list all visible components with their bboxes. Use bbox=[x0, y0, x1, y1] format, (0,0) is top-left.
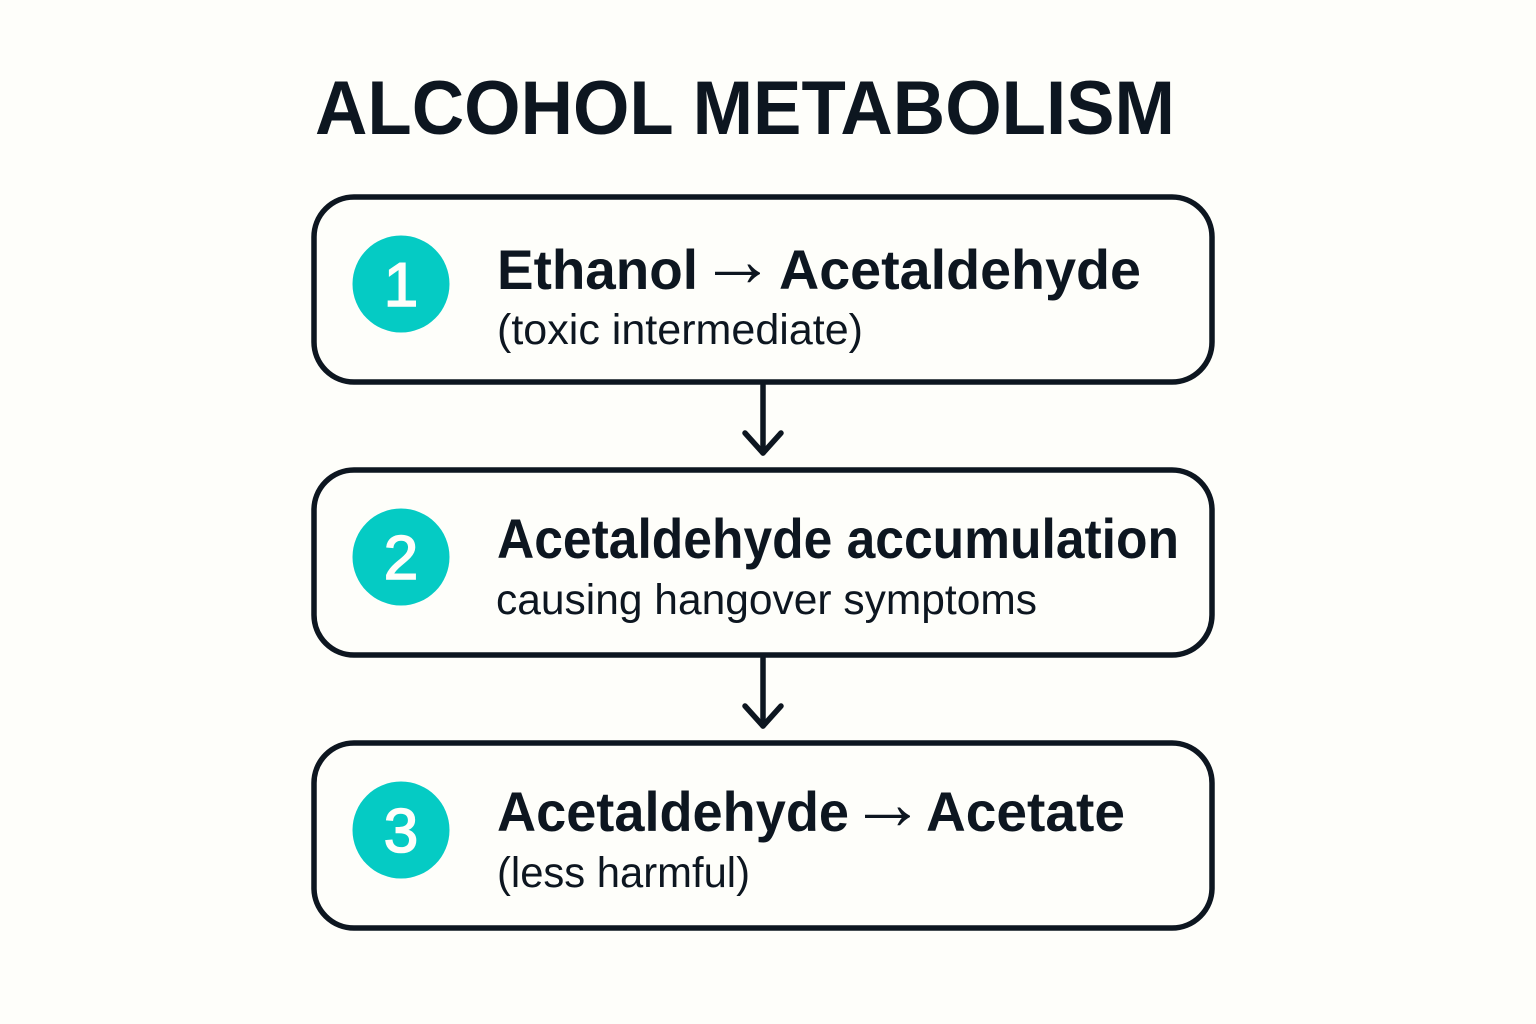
arrow: step 1 to step 2 bbox=[745, 385, 781, 453]
icon: number 2 badge bbox=[352, 508, 450, 606]
panel: step 1 bbox=[314, 197, 1212, 382]
heading: acetaldehyde accumulation: Acetaldehyde accumulation bbox=[497, 507, 1179, 570]
subtext: less harmful: (less harmful) bbox=[497, 849, 750, 897]
panel: step 3 bbox=[314, 743, 1212, 928]
heading: ethanol to acetaldehyde: Acetaldehyde bbox=[779, 238, 1141, 301]
subtext: causing hangover symptoms: causing hangover symptoms bbox=[496, 576, 1037, 624]
icon: number 1 badge bbox=[352, 236, 450, 332]
heading: acetaldehyde to acetate bbox=[497, 761, 1125, 846]
panel: step 2 bbox=[314, 470, 1212, 655]
heading: acetaldehyde to acetate: Acetaldehyde bbox=[497, 780, 849, 843]
subtext: toxic intermediate: (toxic intermediate) bbox=[497, 306, 863, 354]
icon: number 3 badge: 3 bbox=[384, 797, 418, 866]
title: ALCOHOL METABOLISM bbox=[315, 66, 1175, 151]
arrow: step 2 to step 3 bbox=[745, 658, 781, 726]
icon: number 2 badge: 2 bbox=[384, 524, 418, 593]
heading: acetaldehyde to acetate: → bbox=[850, 761, 926, 846]
icon: number 1 badge: 1 bbox=[384, 251, 418, 320]
heading: acetaldehyde to acetate: Acetate bbox=[926, 780, 1125, 843]
heading: ethanol to acetaldehyde: Ethanol bbox=[497, 238, 698, 301]
heading: ethanol to acetaldehyde bbox=[497, 218, 1141, 303]
heading: ethanol to acetaldehyde: → bbox=[700, 218, 776, 303]
icon: number 3 badge bbox=[352, 782, 450, 878]
